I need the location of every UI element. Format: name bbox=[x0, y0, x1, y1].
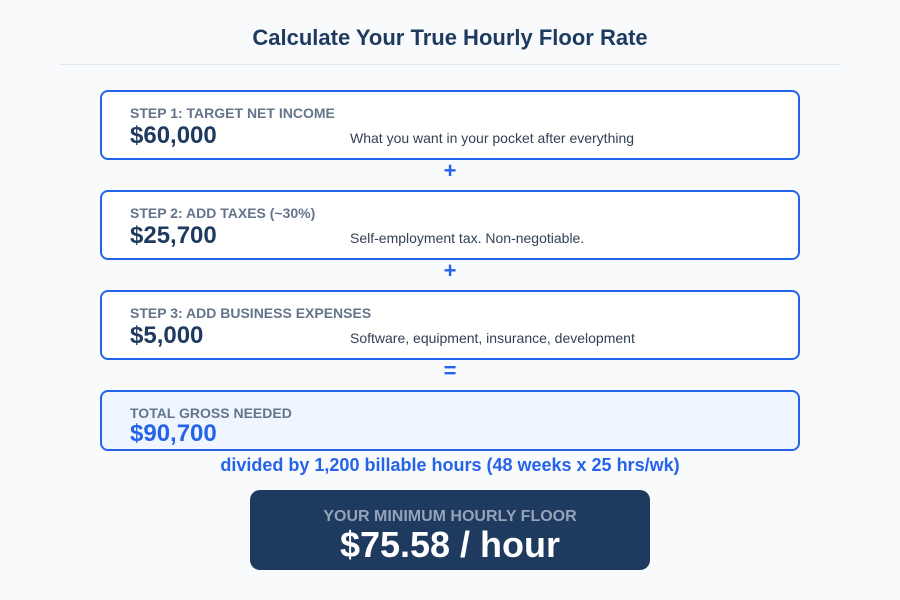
step 1 bbox=[100, 90, 800, 160]
step 1: What you want in your pocket after everything bbox=[350, 130, 634, 146]
step 3: Software, equipment, insurance, development bbox=[350, 330, 635, 346]
step 1: STEP 1: TARGET NET INCOME bbox=[130, 105, 335, 121]
title: Calculate Your True Hourly Floor Rate bbox=[252, 25, 648, 50]
total: TOTAL GROSS NEEDED bbox=[130, 405, 292, 421]
step 2: $25,700 bbox=[130, 222, 217, 249]
step 3: $5,000 bbox=[130, 322, 203, 349]
step 2: STEP 2: ADD TAXES (~30%) bbox=[130, 205, 315, 221]
plus 1: + bbox=[444, 158, 456, 183]
total bbox=[100, 390, 800, 451]
step 2 bbox=[100, 190, 800, 260]
equals: = bbox=[444, 358, 456, 383]
step 3 bbox=[100, 290, 800, 360]
result box bbox=[250, 490, 650, 570]
step 2: Self-employment tax. Non-negotiable. bbox=[350, 230, 584, 246]
total: $90,700 bbox=[130, 420, 217, 447]
plus 2: + bbox=[444, 258, 456, 283]
step 3: STEP 3: ADD BUSINESS EXPENSES bbox=[130, 305, 371, 321]
result box: YOUR MINIMUM HOURLY FLOOR bbox=[323, 508, 577, 525]
result box: $75.58 / hour bbox=[340, 524, 560, 565]
step 1: $60,000 bbox=[130, 122, 217, 149]
divisor note: divided by 1,200 billable hours (48 weeks x 25 hrs/wk) bbox=[220, 455, 680, 475]
